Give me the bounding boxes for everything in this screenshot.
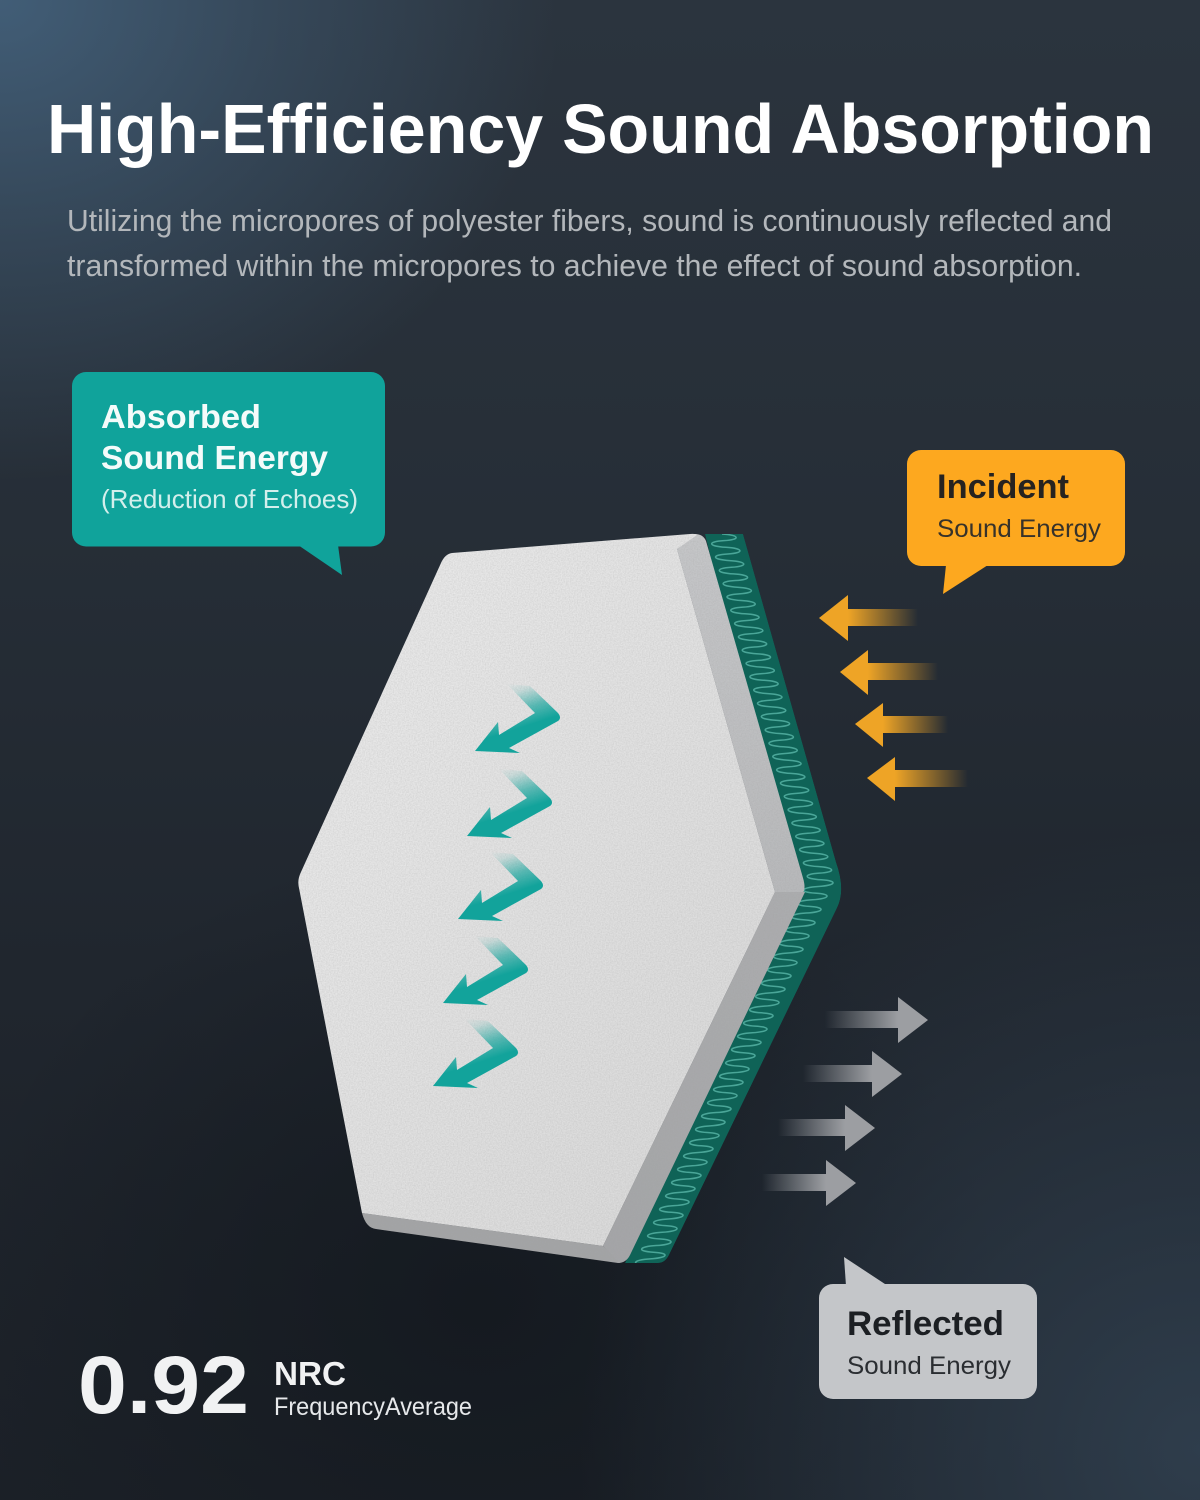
arrow 5 [433,1019,518,1088]
subtitle text: Utilizing the micropores of polyester fibers, sound is continuously reflected and [67,203,1112,238]
NRC rating [78,1340,472,1431]
panel backing: teal corrugated layer [625,534,841,1266]
gray reflected arrows [762,997,928,1206]
reflected arrow 3 [778,1105,875,1151]
panel front face [298,534,775,1246]
panel: hexagonal acoustic panel [298,534,841,1266]
incident arrow 3 [855,703,949,747]
NRC rating: FrequencyAverage [274,1393,472,1421]
reflected arrow 4 [762,1160,856,1206]
arrow 3 [458,852,543,921]
callout: incident sound energy: Incident [937,468,1069,506]
callout: incident sound energy: Sound Energy [937,515,1102,543]
arrow 4 [443,936,528,1005]
title: High-Efficiency Sound Absorption [47,90,1154,168]
reflected arrow 1 [825,997,928,1043]
callout: reflected sound energy: Sound Energy [847,1352,1012,1380]
callout: reflected sound energy [819,1257,1037,1399]
callout: absorbed sound energy: Absorbed [101,398,261,435]
reflected arrow 2 [803,1051,902,1097]
arrow 1 [475,684,560,753]
arrow 2 [467,769,552,838]
callout: reflected sound energy: Reflected [847,1305,1004,1343]
callout: absorbed sound energy [72,372,385,575]
callout: absorbed sound energy: (Reduction of Echoes) [101,484,358,514]
incident arrow 4 [867,757,969,801]
NRC rating: NRC [274,1355,346,1392]
callout: incident sound energy [907,450,1125,594]
subtitle text: transformed within the micropores to achieve the effect of sound absorption. [67,248,1082,283]
orange incident arrows [819,595,969,801]
teal absorption arrows [433,684,560,1088]
incident arrow 2 [840,650,939,695]
incident arrow 1 [819,595,919,641]
callout: absorbed sound energy: Sound Energy [101,439,329,476]
subtitle text [67,203,1112,283]
NRC rating: 0.92 [78,1340,249,1431]
panel edge bevels [362,534,805,1263]
